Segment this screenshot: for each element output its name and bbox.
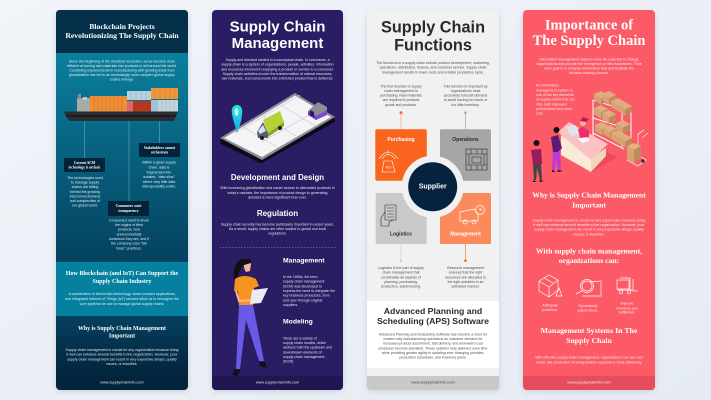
section: blockchain and IoT: How Blockchain (and IoT) Can Support the (66, 270, 179, 277)
icon: delivery truck clock (460, 206, 484, 224)
tile: management (440, 193, 491, 244)
intro text: organizations and provide the emergence of new businesses. Their (536, 62, 643, 66)
tile: purchasing: Purchasing (387, 137, 415, 143)
header band (56, 10, 188, 53)
heading: why supply chain management: Important (572, 200, 606, 209)
illustration: woman with tablet (232, 259, 268, 376)
connector: purchasing (400, 111, 402, 129)
text: improve: Improve (621, 302, 633, 306)
desk (558, 122, 617, 172)
center circle: supplier: Supplier (419, 184, 447, 190)
connector: management (464, 244, 467, 262)
intro text: Since the beginning of the industrial revolution, we've become more (69, 59, 175, 63)
text: management: suppliers. (283, 303, 298, 307)
text: consumers: conscious they are, and if (109, 237, 149, 241)
intro text: management results in lower costs and a faster production cycle. (382, 70, 484, 74)
callout: consumers: transparency (118, 209, 139, 213)
intro text: globalization has led to an increasingly more complex global supply (69, 73, 175, 77)
text: modeling: There are a variety of (283, 336, 317, 340)
icon: map pin (232, 105, 242, 133)
heading: management systems: Management Systems In The (541, 326, 638, 334)
text: logistics: production, warehousing. (381, 285, 421, 289)
footer (367, 376, 499, 390)
section: advanced planning: increased product assortment, fast delivery, and downward cost (383, 342, 483, 346)
section: why supply chain management: issues, or insurities. (106, 362, 138, 366)
section: advanced planning: Scheduling (APS) Software (377, 316, 489, 326)
text: information management: of supply chains that can (536, 98, 575, 102)
text: operations: too little inventory. (451, 103, 480, 107)
icon: truck (257, 111, 284, 140)
text: modeling: downstream elements of (283, 350, 322, 354)
footer url: www.supplychaininfo.com (100, 380, 144, 384)
section: why supply chain management: supply chain management can result in very expensive delays, quality (67, 357, 177, 361)
text: management: express the need to integrate the (283, 289, 335, 293)
text: information management: performance and lower (536, 107, 573, 111)
text: purchasing: goods and products. (385, 103, 417, 107)
customer: back (531, 140, 544, 182)
text: logistics: chain management that (382, 271, 420, 275)
text: development: today's markets, the importance of product design to generating (227, 191, 328, 195)
callout: legacy technology (64, 158, 105, 172)
callout: legacy technology: technology is archaic (68, 165, 101, 169)
intro text: decision-making process. (569, 71, 609, 75)
tile: management: Management (450, 232, 481, 238)
text: technology: The technologies used (67, 176, 103, 180)
teal body background (56, 53, 188, 262)
text: operations: to avoid having too much or (444, 98, 488, 102)
callout: legacy technology: Current SCM (74, 161, 96, 165)
section: advanced planning: modern day manufacturing operations as customer demand for (384, 337, 483, 341)
intro text: efficient at turning raw materials into products to sell around the world. (67, 64, 177, 68)
section: blockchain and IoT (56, 262, 188, 316)
text: data silos: chain, data is (149, 166, 170, 170)
text: logistics: planning, purchasing, (384, 280, 418, 284)
text: information management: management system is (536, 88, 573, 92)
text: data silos: interoperability exists. (142, 185, 176, 189)
center circle: supplier (402, 156, 464, 218)
text: resource management: the right activities in an (447, 280, 484, 284)
section: why supply chain management: it well can enhance several benefits to the organization. However, poor (66, 353, 178, 357)
illustration: phone map with truck (220, 93, 335, 163)
text: management: end user through original (283, 298, 322, 302)
icon: forklift (617, 278, 638, 294)
text: information management: offer both improved (536, 102, 567, 106)
intro text: Supply chain activities involve the transformation of natural resources, (223, 72, 332, 76)
intro text: main goal is to enhance information flow and facilitate the (544, 66, 634, 70)
receptionist (578, 117, 589, 138)
text: regulation: As a result, supply chains are often subject to global and local (229, 227, 326, 231)
customer: front (551, 127, 563, 172)
tile: logistics (376, 193, 427, 244)
text: management: (SCM) was developed to (283, 284, 322, 288)
text: information management: one of the key elements (536, 93, 574, 97)
intro text: raw materials, and components into a finished product that is delivered. (222, 77, 333, 81)
shelf (593, 91, 632, 151)
section: advanced planning: Advanced Planning and Scheduling Software has become a must for (379, 332, 488, 336)
text: purchasing: are required to produce (383, 98, 419, 102)
title: Supply Chain (230, 18, 325, 35)
text: modeling: supply chain models, which (283, 341, 326, 345)
text: technology: behind the growing (70, 190, 100, 194)
text: purchasing: The first function of supply (380, 84, 422, 88)
footer url: www.supplychaininfo.com (567, 380, 611, 384)
section: advanced planning (367, 301, 499, 368)
text: logistics: coordinates all aspects of (381, 275, 421, 279)
text: modeling: address both the upstream and (283, 346, 332, 350)
heading: with supply chain management: organizations can: (559, 256, 619, 264)
heading: management: Management (283, 258, 325, 264)
text: resource management: resources are allocated to (445, 275, 486, 279)
title: Importance of (545, 18, 633, 34)
text: management: In the 1990s, the term (283, 275, 318, 279)
text: technology: our global world. (72, 204, 98, 208)
text: technology: to manage supply (71, 181, 99, 185)
text: information management: cost. (536, 112, 544, 116)
heading: development and design: Development and Design (231, 173, 324, 182)
section: why supply chain management (56, 316, 188, 376)
title: Supply Chain (381, 18, 485, 36)
connector lines (84, 121, 160, 201)
title: The Supply Chain (533, 33, 645, 49)
text: why: it well can enhance several benefits to the organization. However, poor (533, 223, 645, 227)
text: why: supply chain management can result in very expensive delays, quality (534, 228, 644, 232)
text: operations: accurately forecast demand (444, 94, 487, 98)
text: resource management: Resource management (447, 266, 484, 270)
text: logistics: Logistics is the part of supply (378, 266, 424, 270)
heading: why supply chain management: Why is Supply Chain Management (532, 190, 646, 199)
callout: stakeholders: Stakeholders cannot (144, 146, 176, 150)
text: data silos: Within a given supply (142, 161, 176, 165)
footer url: www.supplychaininfo.com (256, 380, 299, 384)
callout: consumers (108, 201, 149, 216)
text: modeling: (SCM). (283, 360, 294, 364)
section: advanced planning: production schedules, and inventory plans. (399, 356, 467, 360)
footer band (523, 376, 655, 390)
icon: container ship (64, 88, 178, 121)
text: why: issues, or insurities. (573, 232, 605, 236)
title: Functions (394, 37, 472, 55)
text: development: demand is more significant than ever. (248, 196, 307, 200)
text: consumers: products, how (118, 228, 140, 232)
text: improve: inventory and (616, 306, 638, 310)
section: blockchain and IoT: core systems we use to manage global supply chains. (80, 302, 164, 306)
heading: regulation: Regulation (257, 209, 298, 218)
text: consumers: environmentally (117, 232, 142, 236)
icon: warehouse (308, 102, 327, 120)
intro text: Information management systems have the potential to change (540, 57, 639, 61)
footer: www.supplychaininfo.com (411, 380, 455, 384)
panel: blockchain projects (56, 10, 188, 391)
text: resource management: optimized manner. (451, 285, 480, 289)
tile: operations: Operations (452, 137, 479, 143)
text: data silos: where very little data (143, 180, 175, 184)
panel: supply chain functions (367, 10, 499, 391)
text: dynamically: Dynamically (578, 304, 598, 308)
text: improve: fulfillment. (619, 311, 635, 315)
icon: weight scale: KG (386, 164, 391, 170)
intro text: The functions in a supply chain include product development, marketing, (376, 61, 490, 65)
illustration: warehouse reception (531, 91, 648, 182)
icon: magnifier over map (576, 280, 601, 296)
section: blockchain and IoT: Supply Chain Industry (92, 279, 152, 285)
intro text: supply chain is a system of organizations, people, activities, information (221, 63, 334, 67)
text: development: With increasing globalization and easier access to alternative products in (220, 186, 335, 190)
text: purchasing: purchasing. Raw materials (380, 94, 422, 98)
panel: supply chain management (212, 10, 343, 391)
connector: operations (464, 111, 467, 129)
tile: operations (440, 129, 491, 181)
text: dynamically: adjust prices. (578, 309, 598, 313)
text: anticipate: problems. (542, 308, 558, 312)
section: advanced planning: Advanced Planning and (384, 306, 482, 316)
tile: logistics: Logistics (390, 232, 412, 238)
text: why: Supply chain management is crucial for any organization because doing (533, 218, 646, 222)
text: regulation: regulations. (268, 232, 287, 236)
callout: consumers: Consumers want (116, 204, 142, 208)
intro text: Supply and demand started in a conceptual chain. In commerce, a (225, 58, 330, 62)
intro text: chains emerge. (110, 78, 134, 82)
title: Management (232, 34, 323, 51)
icon: box with warning (539, 275, 562, 297)
text: consumers: the company uses "fair (111, 242, 148, 246)
callout: stakeholders (139, 143, 180, 157)
text: technology: interconnectedness (70, 194, 101, 198)
footer band (212, 376, 343, 390)
text: information management: An information (536, 84, 559, 88)
text: modeling: supply chain management (283, 355, 324, 359)
intro text: operations, distribution, finance, and customer service. Supply chain (379, 66, 487, 70)
section: blockchain and IoT: and Integrated Internet of Things (IoT) sensors allow us to reimagine the (65, 297, 179, 301)
text: operations: organizations must (451, 89, 480, 93)
text: consumers: the origins of their (115, 223, 144, 227)
heading: modeling: Modeling (283, 318, 313, 326)
section: why supply chain management: Why is Supply Chain Management (78, 326, 166, 332)
text: anticipate: Anticipate (542, 303, 558, 307)
intro text: and resources involved in supplying a product or service to a consumer. (221, 67, 334, 71)
text: consumers: trade" practices. (116, 246, 142, 250)
heading: with supply chain management: With supply chain management, (536, 246, 642, 255)
text: management: key business processes, from (283, 294, 330, 298)
section: advanced planning: pressures become prevalent. These systems help planners save time (379, 346, 487, 350)
text: consumers: Consumers want to know (109, 218, 149, 222)
text: technology: and complexities of (70, 199, 100, 203)
text: data silos: fragmented into (147, 170, 171, 174)
icon: warehouse shelves (466, 149, 487, 170)
icon: clipboard hand (381, 205, 396, 226)
text: management systems: With effective supply chain management, organizations can use cost (535, 356, 643, 360)
tile: purchasing (375, 129, 427, 181)
text: operations: This function is important as (443, 84, 488, 88)
panel: importance of the supply chain (523, 10, 655, 391)
trolley (627, 130, 648, 166)
section: why supply chain management: Supply chain management is crucial for any organization because doing (66, 348, 179, 352)
text: purchasing: chain management is (384, 89, 418, 93)
text: regulation: Supply chain security has become particularly important in recent years. (221, 222, 334, 226)
text: management systems: center, like production or transportation equipment, more effectively. (536, 360, 642, 364)
text: technology: chains are falling (72, 185, 98, 189)
section: why supply chain management: Important (109, 334, 135, 340)
title: Blockchain Projects (89, 22, 155, 30)
text: data silos: isolated, "data silos" (143, 175, 176, 179)
intro text: Combining improvements in manufacturing with growing trade from (69, 69, 175, 73)
callout: stakeholders: orchestrate (151, 150, 169, 154)
text: management: supply chain management (283, 280, 324, 284)
text: resource management: ensures that the right (449, 271, 482, 275)
connector: logistics (400, 244, 402, 262)
heading: management systems: Supply Chain (566, 336, 613, 344)
title: Revolutionizing The Supply Chain (65, 31, 179, 40)
section: blockchain and IoT: A combination of blockchain technology, smart contract applications, (68, 292, 176, 296)
section: advanced planning: while providing greater agility in updating ever changing priorities, (382, 351, 484, 355)
